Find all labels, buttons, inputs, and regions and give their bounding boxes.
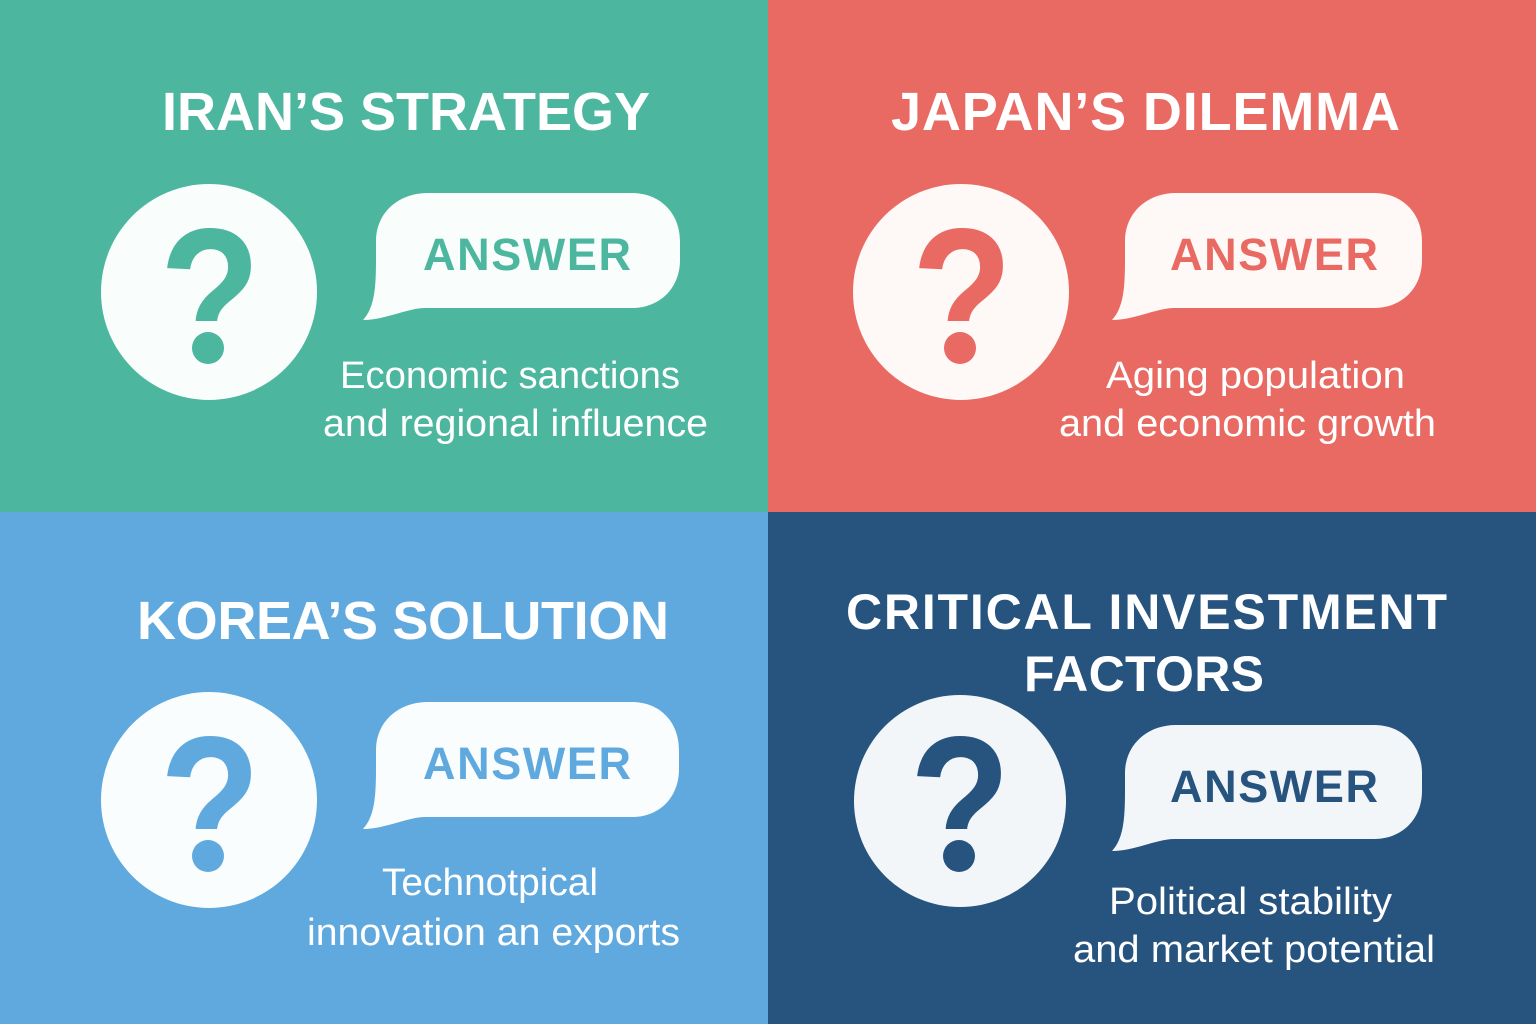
text: critical factors answer: and market potential	[1073, 929, 1435, 971]
panel: critical investment factors	[768, 512, 1536, 1024]
icon: question circle: ?	[160, 696, 260, 911]
panel: Iran's strategy	[0, 0, 768, 512]
text: Korea answer: Technotpical	[382, 862, 598, 904]
heading: critical investment factors	[846, 584, 1447, 702]
text: Korea answer: innovation an exports	[307, 912, 680, 954]
speech bubble: answer: ANSWER	[1170, 761, 1378, 812]
text: Iran answer: Economic sanctions	[340, 355, 680, 397]
text: Iran answer: and regional influence	[323, 403, 708, 445]
speech bubble: answer: ANSWER	[423, 229, 631, 280]
speech bubble: answer: ANSWER	[1170, 229, 1378, 280]
icon: question circle	[853, 184, 1069, 403]
icon: question circle	[854, 695, 1066, 911]
heading: critical investment factors: FACTORS	[1024, 646, 1264, 702]
text: Korea answer	[307, 862, 680, 954]
panel: Korea's solution	[0, 512, 768, 1024]
heading: Iran's strategy: IRAN’S STRATEGY	[162, 82, 650, 142]
icon: question circle	[101, 692, 317, 911]
speech bubble: answer	[1112, 725, 1422, 851]
icon: question circle: ?	[910, 696, 1010, 911]
speech bubble: answer	[363, 702, 679, 829]
icon: question circle: ?	[160, 188, 260, 403]
text: critical factors answer: Political stability	[1109, 881, 1392, 923]
text: Iran answer	[323, 355, 708, 445]
speech bubble: answer	[363, 193, 680, 320]
text: Japan answer	[1059, 355, 1436, 445]
text: Japan answer: Aging population	[1106, 355, 1405, 397]
speech bubble: answer: ANSWER	[423, 738, 631, 789]
heading: critical investment factors: CRITICAL INVESTMENT	[846, 584, 1447, 640]
speech bubble: answer	[1112, 193, 1422, 320]
panel: Japan's dilemma	[768, 0, 1536, 512]
text: Japan answer: and economic growth	[1059, 403, 1436, 445]
heading: Korea's solution: KOREA’S SOLUTION	[137, 591, 669, 651]
heading: Japan's dilemma: JAPAN’S DILEMMA	[891, 82, 1400, 142]
text: critical factors answer	[1073, 881, 1435, 971]
icon: question circle	[101, 184, 317, 403]
icon: question circle: ?	[912, 188, 1012, 403]
